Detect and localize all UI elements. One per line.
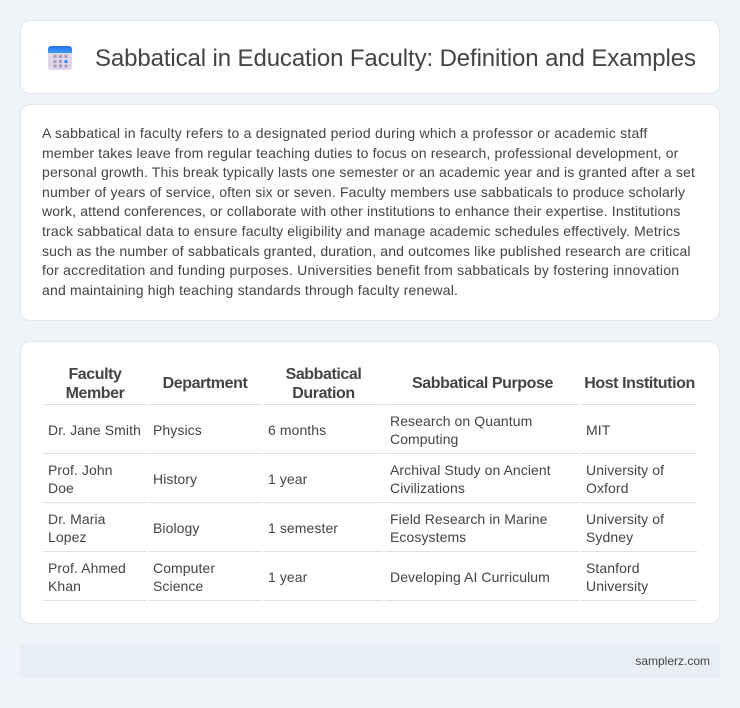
table row: Ahmed Khan: Developing AI Curriculum [390, 569, 550, 585]
header panel [20, 20, 720, 94]
table row: Jane Smith: Computing [390, 431, 458, 447]
table row: Jane Smith: MIT [586, 422, 610, 438]
table row: Maria Lopez: Dr. Maria [48, 511, 106, 527]
panel: definition text: A sabbatical in faculty refers to a designated period during which a professor or academic staff [42, 125, 647, 141]
table header: Member [66, 385, 124, 402]
table header: Sabbatical Purpose [412, 375, 553, 392]
table row: Maria Lopez: Ecosystems [390, 529, 466, 545]
table row: Ahmed Khan: Stanford [586, 560, 640, 576]
table row: John Doe: Prof. John [48, 462, 113, 478]
panel: definition text: number of years of service, often six or seven. Faculty members use sabbaticals to produce scholarly [42, 184, 685, 200]
table row: Ahmed Khan: Khan [48, 578, 81, 594]
footer bar [20, 644, 720, 678]
table header: Duration [292, 385, 355, 402]
table row: Jane Smith: Dr. Jane Smith [48, 422, 141, 438]
table row: Maria Lopez [48, 511, 664, 545]
table row: Ahmed Khan: Prof. Ahmed [48, 560, 126, 576]
table row: Jane Smith: Physics [153, 422, 202, 438]
table row: Jane Smith [48, 413, 610, 447]
table row: Jane Smith: 6 months [268, 422, 326, 438]
icon: calendar [48, 46, 72, 70]
panel: definition text [20, 104, 720, 321]
table header [66, 366, 695, 402]
table row: John Doe: History [153, 471, 197, 487]
table row: John Doe: Doe [48, 480, 74, 496]
table row: Ahmed Khan: Science [153, 578, 203, 594]
table row: Ahmed Khan: Computer [153, 560, 215, 576]
table row: Maria Lopez: Biology [153, 520, 199, 536]
table header: Department [163, 375, 247, 392]
table row: Jane Smith: Research on Quantum [390, 413, 532, 429]
table row: John Doe: University of [586, 462, 664, 478]
table row: Maria Lopez: Lopez [48, 529, 87, 545]
table row: John Doe: Oxford [586, 480, 628, 496]
panel: definition text: track sabbatical data to ensure faculty eligibility and manage academic schedules effectively. Metrics [42, 223, 680, 239]
table row: Ahmed Khan: University [586, 578, 648, 594]
panel: definition text: and maintaining high teaching standards through faculty renewal. [42, 282, 458, 298]
table row: Maria Lopez: 1 semester [268, 520, 338, 536]
panel: definition text: member takes leave from regular teaching duties to focus on research, professional development, or [42, 145, 678, 161]
table row: John Doe: 1 year [268, 471, 307, 487]
panel: definition text: work, attend conferences, or collaborate with other institutions to enhance their expertise. Institutions [42, 203, 680, 219]
table row: John Doe [48, 462, 664, 496]
panel: definition text: for accreditation and funding purposes. Universities benefit from sabbaticals by fostering innovation [42, 262, 679, 278]
panel: definition text: such as the number of sabbaticals granted, duration, and outcomes like published research are critical [42, 243, 691, 259]
table row: Ahmed Khan: 1 year [268, 569, 307, 585]
footer source: samplerz.com [635, 654, 710, 668]
table row: John Doe: Archival Study on Ancient [390, 462, 551, 478]
title: Sabbatical in Education Faculty: Definition and Examples [95, 45, 696, 72]
table row: Ahmed Khan [48, 560, 648, 594]
table row: Maria Lopez: Field Research in Marine [390, 511, 548, 527]
panel: faculty table [20, 341, 720, 624]
table header: Faculty [68, 366, 122, 383]
table header: Sabbatical [286, 366, 361, 383]
panel: definition text: personal growth. This break typically lasts one semester or an academic year and is granted after a set [42, 164, 695, 180]
table header: Host Institution [584, 375, 695, 392]
table row: Maria Lopez: Sydney [586, 529, 633, 545]
table row: Maria Lopez: University of [586, 511, 664, 527]
table row: John Doe: Civilizations [390, 480, 465, 496]
